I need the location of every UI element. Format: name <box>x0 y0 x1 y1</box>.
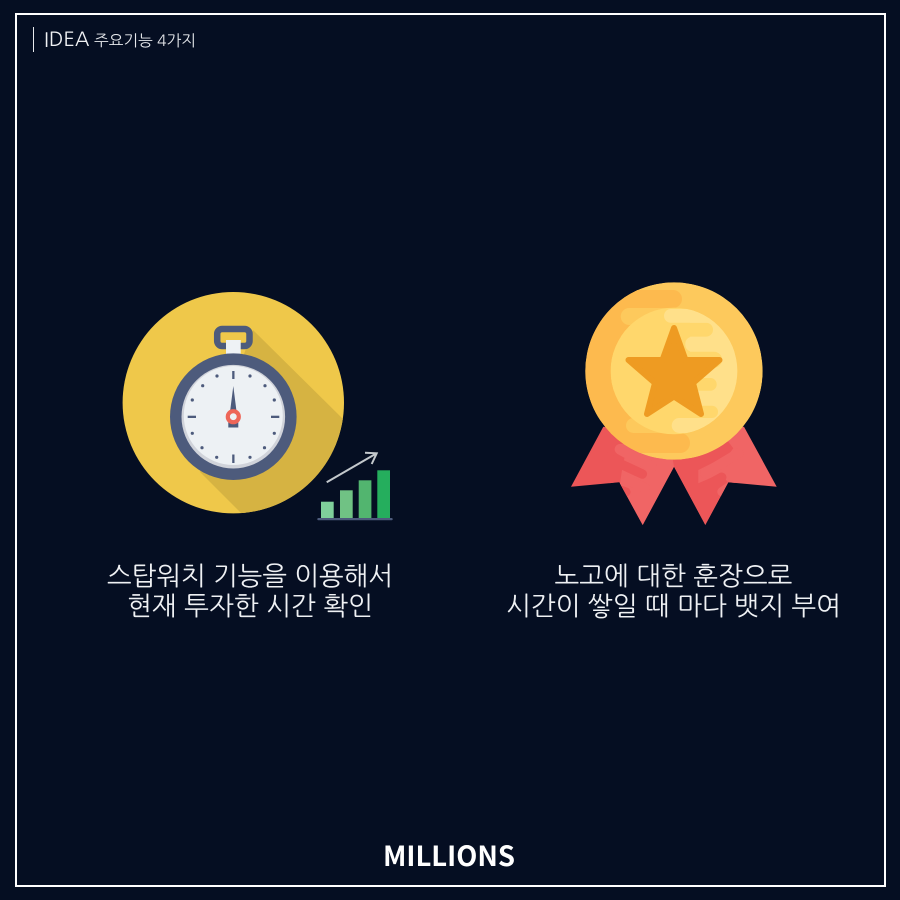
icon: medal with ribbon <box>565 282 783 530</box>
inner disc <box>611 308 737 434</box>
caption: stopwatch: 현재 투자한 시간 확인 <box>127 593 373 619</box>
brand wordmark: MILLIONS <box>383 834 515 874</box>
caption: stopwatch: 스탑워치 기능을 이용해서 <box>107 563 393 589</box>
header: IDEA <box>44 29 90 49</box>
header: 주요기능 4가지 <box>94 33 196 49</box>
right ribbon <box>673 426 777 525</box>
caption: medal: 시간이 쌓일 때 마다 뱃지 부여 <box>506 593 841 619</box>
caption: stopwatch <box>107 563 393 619</box>
icon: stopwatch <box>123 292 345 530</box>
gold disc <box>580 282 763 460</box>
caption: medal: 노고에 대한 훈장으로 <box>554 563 792 589</box>
left ribbon <box>571 426 674 525</box>
light streaks <box>664 309 738 433</box>
header <box>33 27 196 52</box>
icon: rising bar chart with arrow <box>317 453 393 520</box>
star <box>628 328 720 414</box>
caption: medal <box>506 563 841 619</box>
